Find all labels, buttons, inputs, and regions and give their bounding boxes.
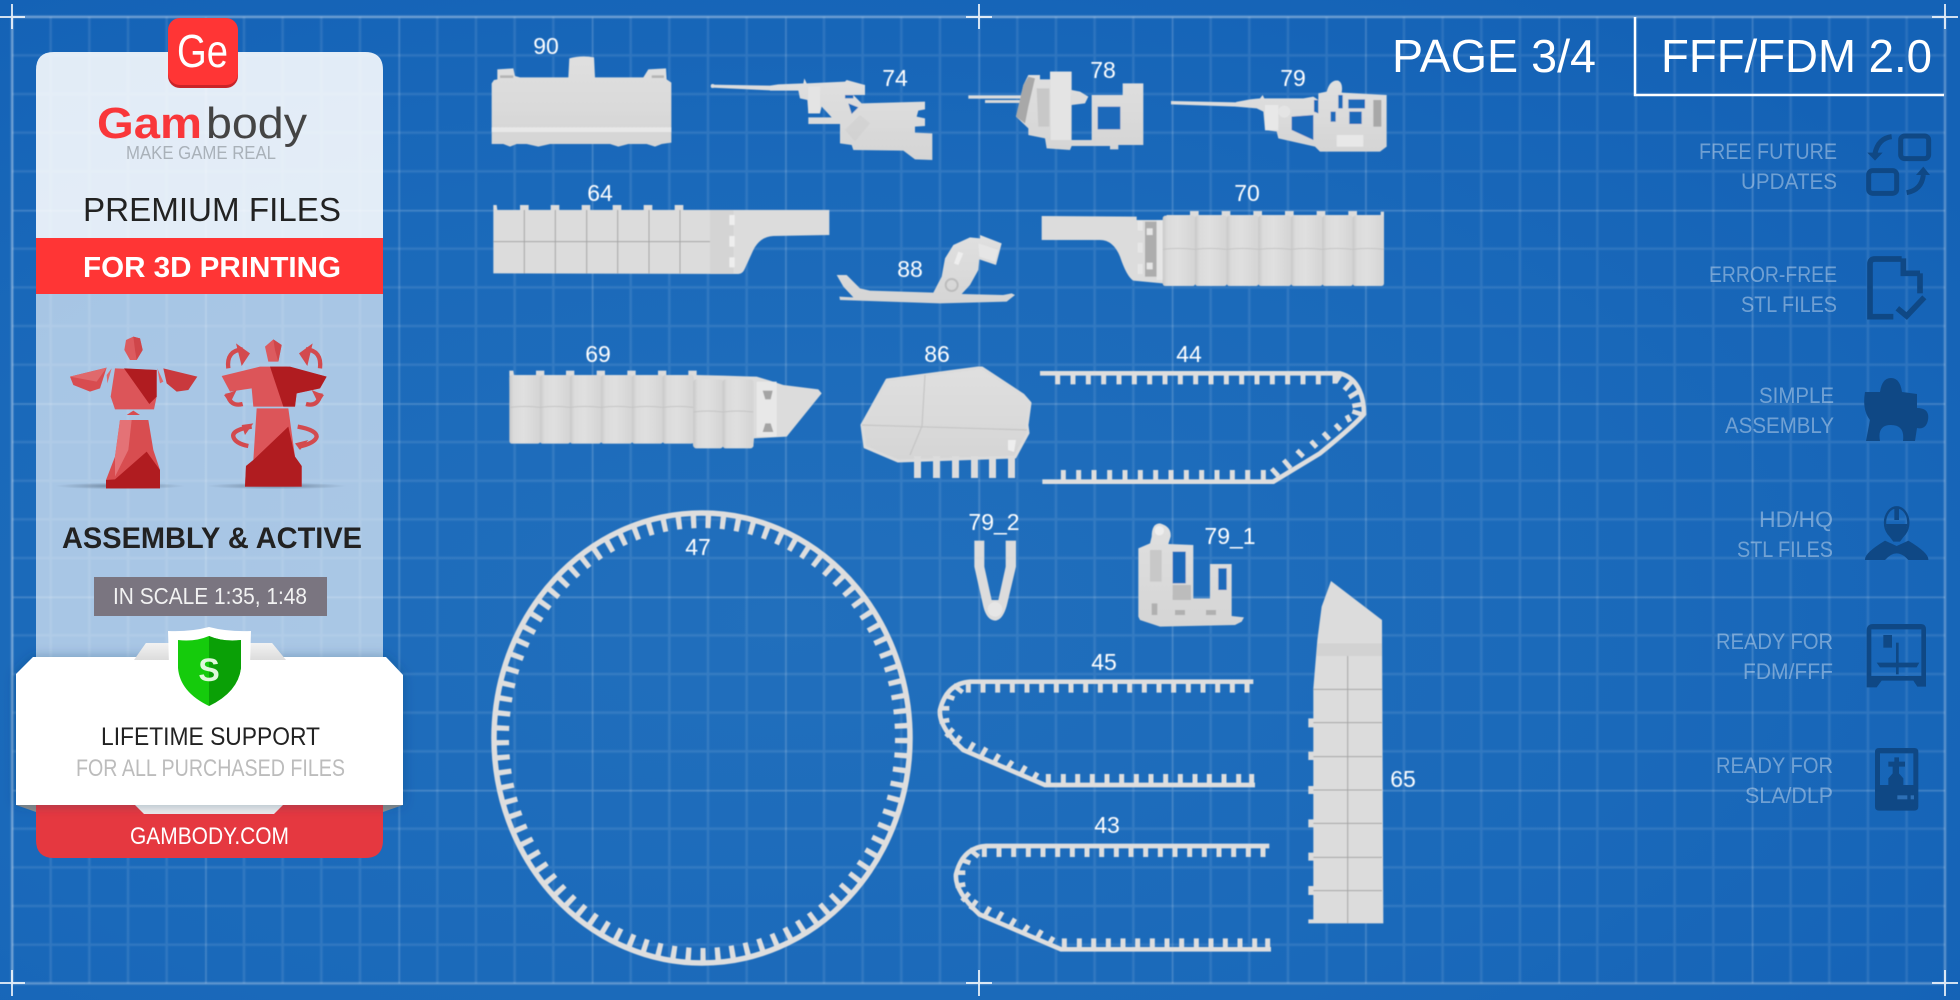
bottom red bar: GAMBODY.COM xyxy=(130,823,289,850)
part 70 xyxy=(1042,180,1384,286)
feature: HD/HQ STL files: STL FILES xyxy=(1737,537,1833,562)
part 69: 69 xyxy=(585,341,611,367)
part 78: 78 xyxy=(1090,57,1116,83)
part 65: 65 xyxy=(1390,766,1416,792)
part 86: 86 xyxy=(924,341,950,367)
wordmark: body xyxy=(206,99,307,148)
wordmark xyxy=(97,99,307,163)
feature: error-free STL files xyxy=(1709,258,1924,317)
feature: free future updates: FREE FUTURE xyxy=(1699,139,1837,164)
logo badge: Ge xyxy=(177,25,228,77)
feature: HD/HQ STL files: HD/HQ xyxy=(1759,507,1833,532)
part 47 ring track: 47 xyxy=(685,534,711,560)
part 79_2: 79_2 xyxy=(968,509,1020,535)
feature: simple assembly: ASSEMBLY xyxy=(1725,413,1834,438)
part 64 xyxy=(493,180,829,274)
version box: FFF/FDM 2.0 xyxy=(1661,30,1932,82)
icon: shield xyxy=(168,627,251,712)
part 90: 90 xyxy=(533,33,559,59)
part 74 xyxy=(711,65,932,160)
icon: assembled statue in pieces xyxy=(55,337,197,489)
red band: for 3D printing: FOR 3D PRINTING xyxy=(83,252,341,284)
support card xyxy=(16,627,403,814)
feature: error-free STL files: STL FILES xyxy=(1741,292,1837,317)
scale badge xyxy=(94,577,327,616)
part 74: 74 xyxy=(882,65,908,91)
icon: statue with rotation arrows xyxy=(207,339,347,489)
wordmark: Gam xyxy=(97,99,202,148)
part 45 track: 45 xyxy=(1091,649,1117,675)
feature: error-free STL files: ERROR-FREE xyxy=(1709,262,1837,287)
part 79_1 xyxy=(1138,523,1256,627)
part 88 xyxy=(837,235,1015,303)
feature: simple assembly: SIMPLE xyxy=(1759,383,1834,408)
heading: premium files: PREMIUM FILES xyxy=(83,191,341,228)
feature: ready for FDM/FFF: READY FOR xyxy=(1716,629,1833,654)
icon: shield: S xyxy=(198,652,220,688)
feature: free future updates: UPDATES xyxy=(1741,169,1837,194)
part 79: 79 xyxy=(1280,65,1306,91)
part 70: 70 xyxy=(1234,180,1260,206)
bottom red bar xyxy=(36,800,383,858)
part 44 track xyxy=(1040,341,1364,482)
panel lower translucent section xyxy=(36,294,383,664)
wordmark: MAKE GAME REAL xyxy=(126,143,276,163)
part 86 xyxy=(862,341,1030,478)
part 65 xyxy=(1308,581,1416,923)
part 45 track xyxy=(939,649,1255,785)
panel: Gambody sidebar xyxy=(16,18,403,858)
feature: free future updates xyxy=(1699,136,1930,194)
support card: FOR ALL PURCHASED FILES xyxy=(76,755,345,782)
part 79_2 xyxy=(968,509,1020,621)
part 43 track: 43 xyxy=(1094,812,1120,838)
part 79_1: 79_1 xyxy=(1204,523,1256,549)
page number: PAGE 3/4 xyxy=(1392,30,1596,82)
part 78 xyxy=(968,57,1143,150)
panel: features list xyxy=(1699,136,1930,811)
red band: for 3D printing xyxy=(36,238,383,294)
version box xyxy=(1635,17,1944,95)
part 88: 88 xyxy=(897,256,923,282)
part 69 xyxy=(509,341,822,448)
part 47 ring track xyxy=(494,513,910,963)
part 43 track xyxy=(955,812,1271,949)
feature: ready for SLA/DLP: SLA/DLP xyxy=(1745,783,1833,808)
feature: ready for SLA/DLP: READY FOR xyxy=(1716,753,1833,778)
feature: ready for FDM/FFF xyxy=(1716,624,1926,687)
scale badge: IN SCALE 1:35, 1:48 xyxy=(113,583,307,609)
parts layout xyxy=(492,33,1416,963)
feature: HD/HQ STL files xyxy=(1737,507,1928,562)
panel top section xyxy=(36,52,383,238)
feature: ready for SLA/DLP xyxy=(1716,748,1918,811)
support card: LIFETIME SUPPORT xyxy=(101,723,320,751)
heading: assembly and active: ASSEMBLY & ACTIVE xyxy=(62,522,362,555)
feature: ready for FDM/FFF: FDM/FFF xyxy=(1743,659,1833,684)
part 64: 64 xyxy=(587,180,613,206)
part 90 xyxy=(492,33,671,147)
part 79 xyxy=(1171,65,1387,152)
part 44 track: 44 xyxy=(1176,341,1202,367)
feature: simple assembly xyxy=(1725,378,1928,441)
logo badge xyxy=(168,18,238,88)
